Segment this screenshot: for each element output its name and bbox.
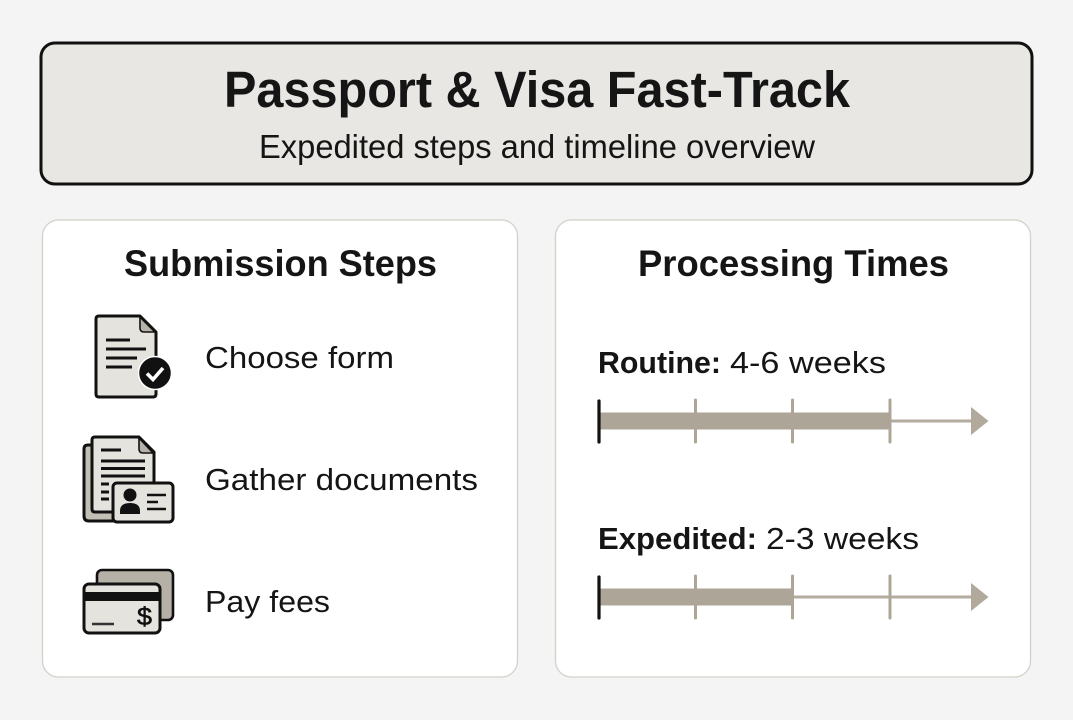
expedited timeline: [598, 521, 988, 618]
panel heading: processing times: Processing Times: [638, 243, 949, 284]
header banner: [41, 43, 1032, 184]
routine timeline: [598, 345, 988, 442]
icon: form document with check mark: [96, 316, 172, 397]
step label: gather documents: Gather documents: [205, 462, 478, 497]
icon: payment cards: $: [137, 603, 152, 631]
icon: payment cards: [84, 570, 173, 633]
step label: choose form: Choose form: [205, 340, 394, 375]
routine label: [598, 345, 886, 380]
panel heading: submission steps: Submission Steps: [124, 243, 437, 284]
routine label: 4-6 weeks: [730, 345, 886, 380]
title: Passport & Visa Fast-Track: [224, 61, 851, 118]
expedited bar: [599, 588, 793, 606]
expedited label: 2-3 weeks: [766, 521, 919, 556]
panel: submission steps: [42, 220, 518, 677]
routine label: Routine:: [598, 345, 721, 380]
step label: pay fees: Pay fees: [205, 584, 330, 619]
expedited label: [598, 521, 919, 556]
subtitle: Expedited steps and timeline overview: [259, 128, 815, 165]
expedited label: Expedited:: [598, 521, 757, 556]
icon: documents and id card: [84, 437, 173, 522]
routine bar: [599, 412, 890, 430]
panel: processing times: [556, 220, 1030, 677]
